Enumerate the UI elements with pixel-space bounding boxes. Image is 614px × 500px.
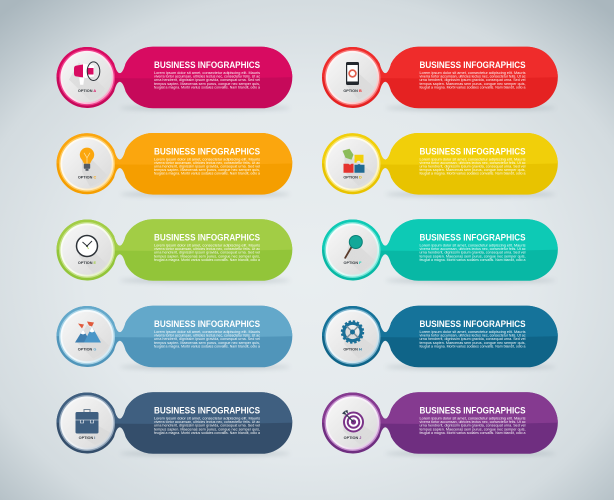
text block bbox=[420, 146, 526, 176]
icon: gear bbox=[342, 321, 374, 358]
label: option G: OPTION G bbox=[78, 348, 96, 352]
label: option D: OPTION D bbox=[343, 175, 362, 179]
panel: option E bbox=[57, 219, 292, 284]
icon: magnifier bbox=[345, 236, 374, 272]
icon: smartphone bbox=[346, 62, 374, 100]
label: option E: OPTION E bbox=[78, 261, 97, 265]
panel: option G bbox=[57, 306, 292, 370]
text block bbox=[420, 406, 526, 435]
text block bbox=[154, 319, 260, 348]
icon: light bulb bbox=[80, 148, 107, 187]
text block bbox=[420, 319, 526, 348]
label: option J: OPTION J bbox=[344, 436, 361, 440]
icon: puzzle pieces bbox=[342, 149, 374, 186]
text block bbox=[420, 232, 526, 262]
text block bbox=[154, 406, 260, 435]
icon: megaphone bbox=[69, 62, 105, 100]
label: option B: OPTION B bbox=[343, 89, 362, 93]
panel: option D bbox=[322, 133, 558, 197]
panel: option C bbox=[57, 133, 292, 197]
icon: mountains with flags bbox=[75, 322, 109, 358]
text block bbox=[154, 146, 260, 176]
panel: option A bbox=[57, 47, 292, 111]
panel: option J bbox=[322, 392, 558, 456]
panel: option F bbox=[322, 219, 558, 284]
label: option H: OPTION H bbox=[343, 348, 362, 352]
label: option I: OPTION I bbox=[79, 436, 95, 440]
icon: target with dart bbox=[342, 410, 374, 445]
label: option F: OPTION F bbox=[344, 261, 362, 265]
text block bbox=[154, 60, 260, 89]
label: option A: OPTION A bbox=[78, 89, 96, 93]
icon: briefcase bbox=[76, 410, 111, 445]
label: option C: OPTION C bbox=[78, 175, 96, 179]
text block bbox=[420, 60, 526, 89]
panel: option B bbox=[322, 47, 558, 111]
panel: option I bbox=[57, 392, 292, 456]
panel: option H bbox=[322, 306, 558, 370]
text block bbox=[154, 232, 260, 262]
icon: clock bbox=[76, 236, 107, 273]
